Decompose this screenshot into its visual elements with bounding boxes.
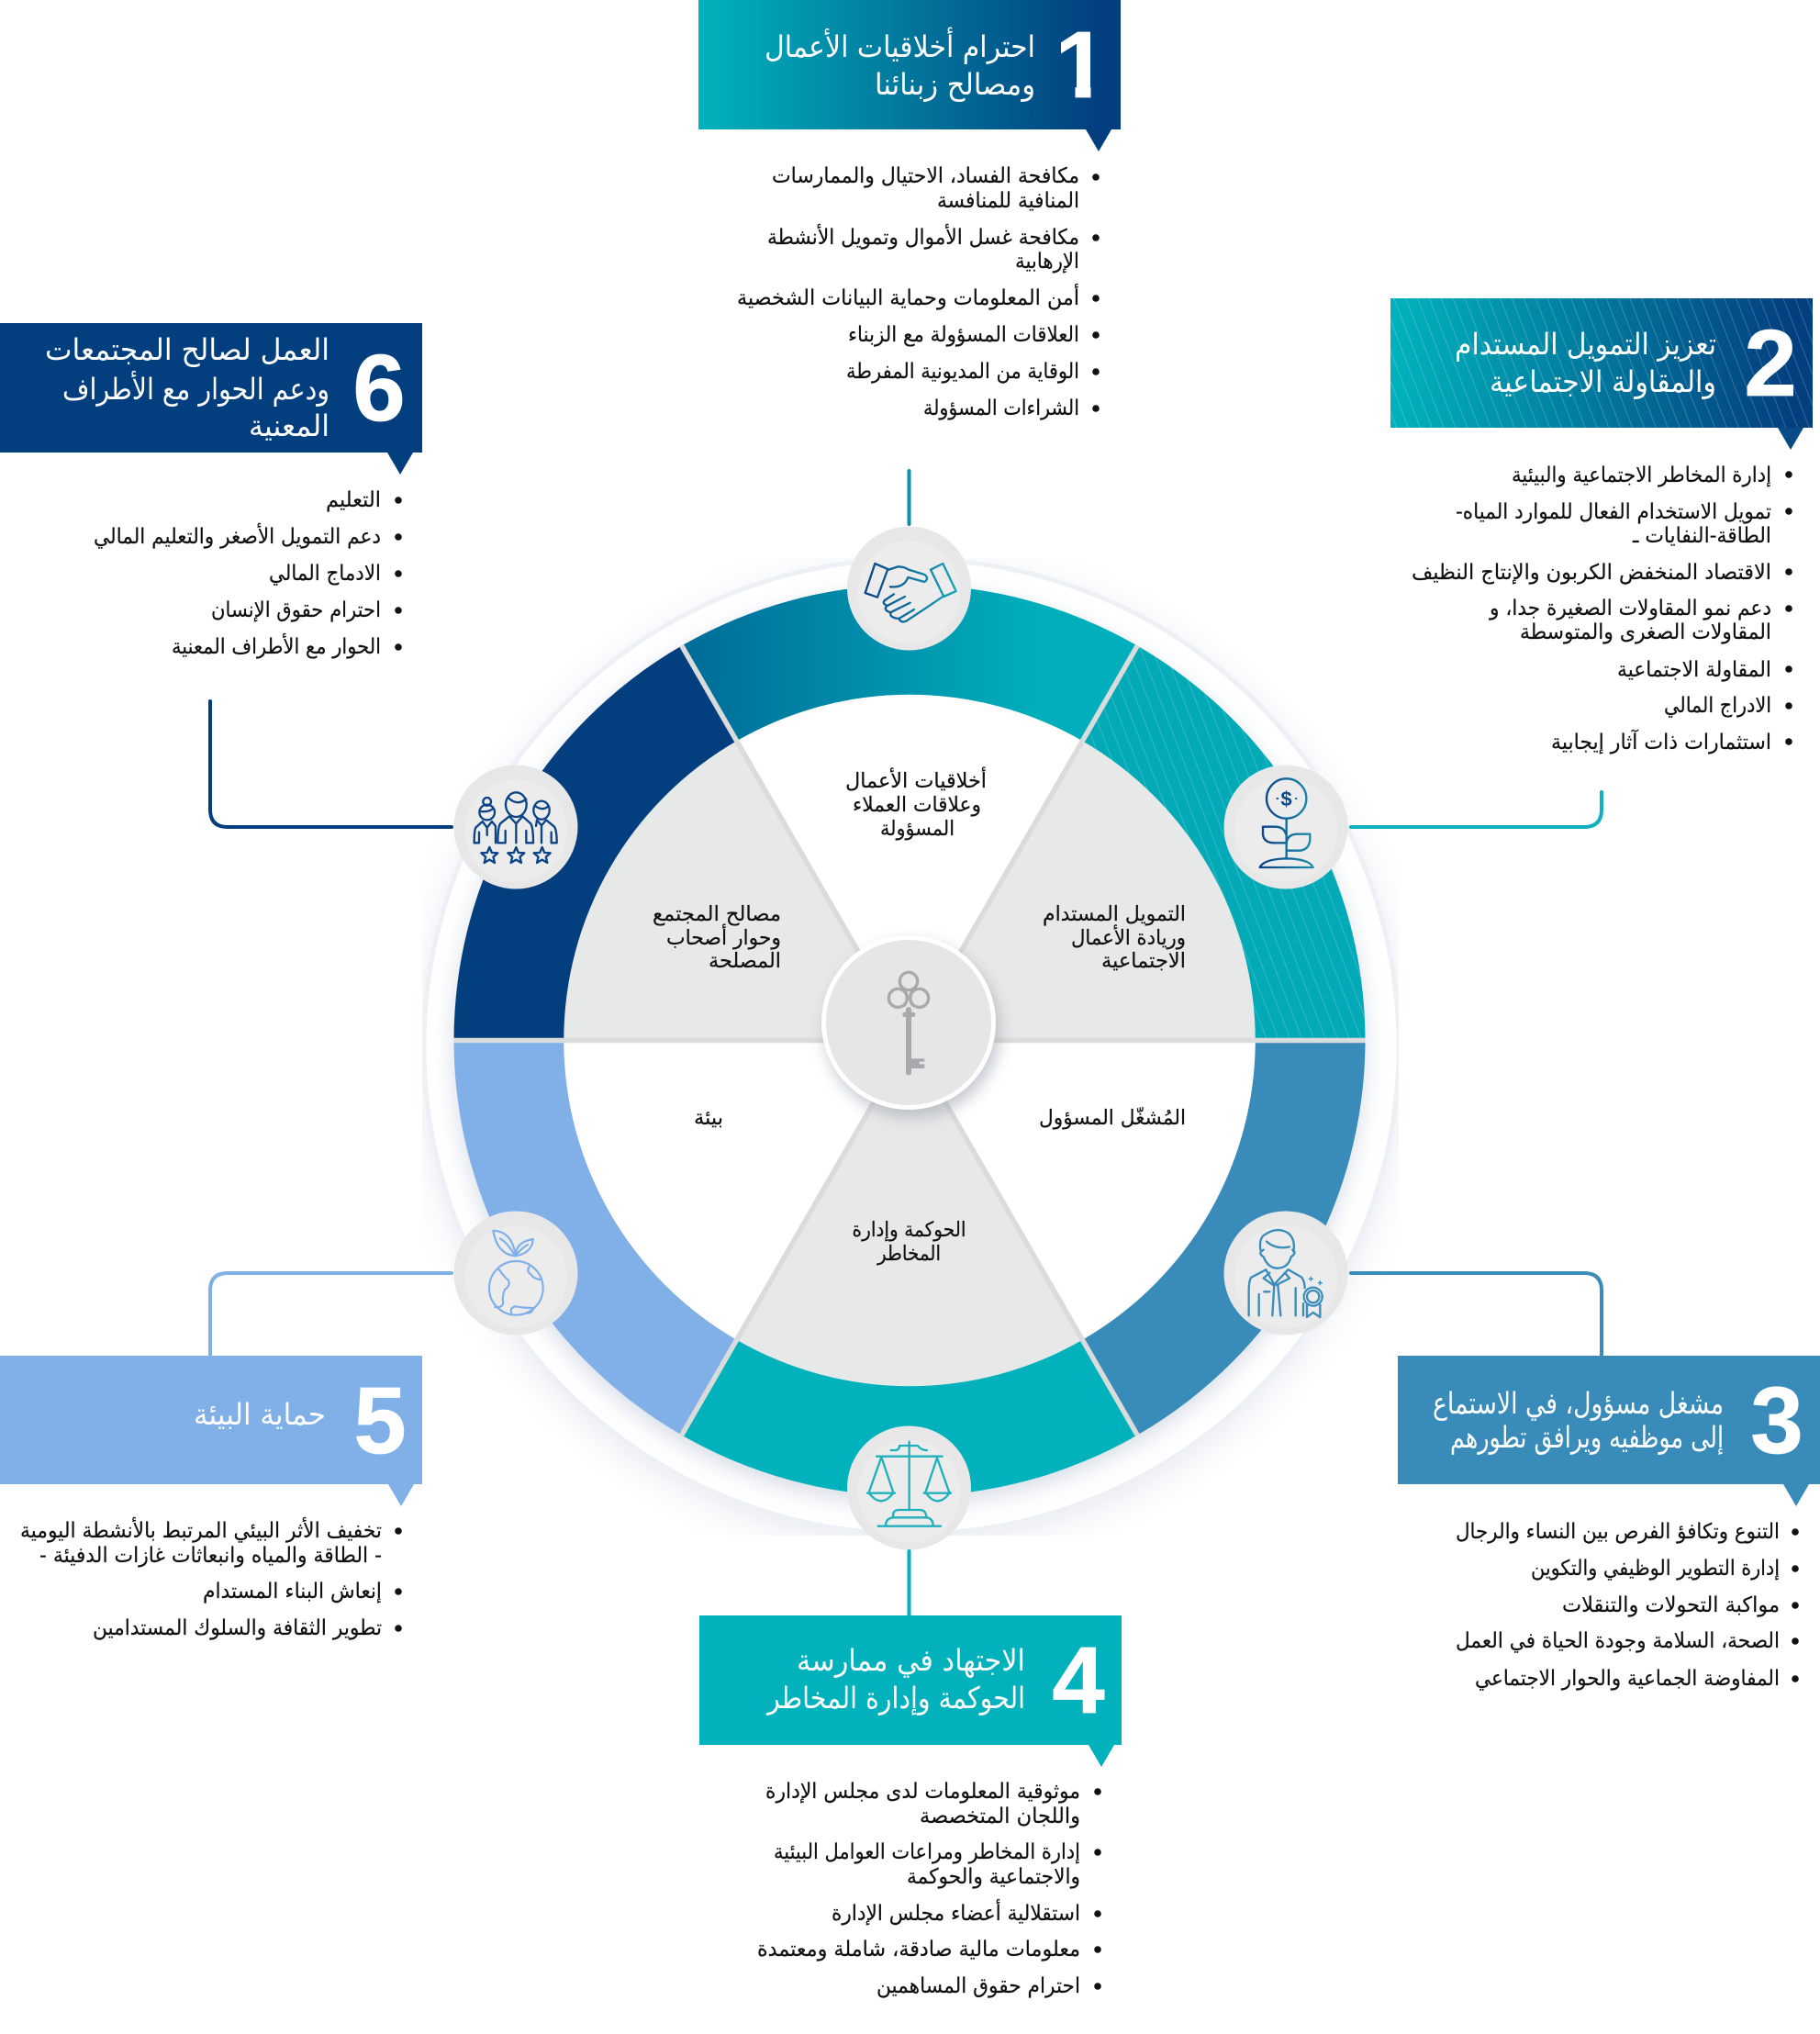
wheel label: ethics: أخلاقيات الأعمال <box>845 766 987 793</box>
heading box 1 <box>698 0 1121 151</box>
bullet list 4: والاجتماعية والحوكمة <box>907 1865 1080 1889</box>
icon: employee with badge <box>1224 1212 1347 1335</box>
heading box 4: الاجتهاد في ممارسة <box>797 1643 1025 1678</box>
bullet list 3 <box>1456 1520 1799 1691</box>
bullet list 2 <box>1412 464 1792 754</box>
bullet list 4: معلومات مالية صادقة، شاملة ومعتمدة <box>757 1938 1080 1961</box>
bullet list 2: الطاقة-النفايات ـ <box>1632 524 1771 548</box>
bullet list 6 <box>94 488 402 659</box>
heading box 1: احترام أخلاقيات الأعمال <box>765 27 1035 64</box>
bullet list 6: التعليم <box>326 488 381 512</box>
wheel halo <box>423 559 1400 1544</box>
icon: key <box>824 938 993 1107</box>
wheel label: ethics <box>845 766 987 841</box>
bullet list 6: الحوار مع الأطراف المعنية <box>172 633 381 659</box>
bullet list 2: إدارة المخاطر الاجتماعية والبيئية <box>1512 464 1771 487</box>
bullet list 3: المفاوضة الجماعية والحوار الاجتماعي <box>1475 1667 1780 1691</box>
heading box 6: 6 <box>352 335 406 441</box>
bullet list 3: إدارة التطوير الوظيفي والتكوين <box>1531 1557 1780 1581</box>
bullet list 4: احترام حقوق المساهمين <box>877 1974 1080 1998</box>
icon: three people with stars <box>453 766 578 888</box>
bullet list 5 <box>20 1517 402 1640</box>
bullet list 4: استقلالية أعضاء مجلس الإدارة <box>832 1899 1080 1926</box>
circular wheel <box>454 585 1365 1496</box>
bullet list 4 <box>757 1780 1101 1998</box>
connector: bottom <box>907 1551 910 1616</box>
wheel label: community <box>653 902 781 973</box>
wheel label: community: المصلحة <box>709 949 781 973</box>
panel 5: environment <box>0 1356 422 1640</box>
bullet list 1: الإرهابية <box>1015 250 1079 274</box>
heading box 3: 3 <box>1750 1368 1803 1473</box>
connector: top <box>907 471 910 524</box>
heading box 6: ودعم الحوار مع الأطراف <box>62 370 329 407</box>
heading box 1: ومصالح زبنائنا <box>875 67 1035 102</box>
wheel label: community: وحوار أصحاب <box>666 923 781 950</box>
bullet list 3: الصحة، السلامة وجودة الحياة في العمل <box>1456 1629 1780 1653</box>
center key circle shadow <box>824 942 1000 1118</box>
bullet list 5: تطوير الثقافة والسلوك المستدامين <box>93 1616 382 1640</box>
bullet list 1: العلاقات المسؤولة مع الزبناء <box>848 323 1079 347</box>
heading box 3 <box>1398 1356 1820 1506</box>
heading box 2: والمقاولة الاجتماعية <box>1490 364 1716 399</box>
connector: upper left <box>210 701 452 827</box>
bullet list 4: موثوقية المعلومات لدى مجلس الإدارة <box>765 1780 1080 1804</box>
bullet list 1: أمن المعلومات وحماية البيانات الشخصية <box>737 284 1079 310</box>
wheel label: community: مصالح المجتمع <box>653 902 781 926</box>
heading box 5 <box>0 1356 422 1506</box>
bullet list 4: إدارة المخاطر ومراعات العوامل البيئية <box>774 1840 1080 1864</box>
heading box 5: 5 <box>353 1368 407 1473</box>
panel 1: business ethics <box>698 0 1121 420</box>
wheel label: ethics: المسؤولة <box>880 817 955 841</box>
heading box 4: 4 <box>1052 1627 1105 1733</box>
bullet list 2: الاقتصاد المنخفض الكربون والإنتاج النظيف <box>1412 561 1771 585</box>
bullet list 2: المقاولة الاجتماعية <box>1617 658 1771 682</box>
wheel label: governance: المخاطر <box>877 1242 941 1266</box>
heading box 5: حماية البيئة <box>194 1397 326 1432</box>
bullet list 5: إنعاش البناء المستدام <box>203 1580 382 1604</box>
icon: flower with dollar: $ <box>1280 788 1292 810</box>
bullet list 1: مكافحة غسل الأموال وتمويل الأنشطة <box>767 224 1079 250</box>
bullet list 4: واللجان المتخصصة <box>920 1805 1080 1828</box>
bullet list 1: المنافية للمنافسة <box>937 189 1079 213</box>
heading box 4 <box>699 1615 1122 1767</box>
wheel label: sustainable finance: الاجتماعية <box>1101 949 1186 973</box>
sector: business ethics <box>682 585 1137 1041</box>
bullet list 2: الادراج المالي <box>1664 694 1771 718</box>
icon: flower with dollar <box>1224 766 1347 888</box>
bullet list 2: دعم نمو المقاولات الصغيرة جدا، و <box>1489 597 1771 620</box>
bullet list 5: - الطاقة والمياه وانبعاثات غازات الدفيئة - <box>39 1544 382 1568</box>
wheel label: sustainable finance <box>1043 902 1186 973</box>
wheel label: employer: المُشغّل المسؤول <box>1039 1106 1186 1130</box>
heading box 3: إلى موظفيه ويرافق تطورهم <box>1450 1420 1724 1455</box>
wheel label: ethics: وعلاقات العملاء <box>853 793 981 817</box>
sector: responsible employer <box>910 1041 1365 1435</box>
bullet list 5: تخفيف الأثر البيئي المرتبط بالأنشطة اليومية <box>20 1517 382 1543</box>
sector: sustainable finance <box>910 646 1365 1041</box>
wheel label: environment: بيئة <box>694 1106 723 1130</box>
heading box 3: مشغل مسؤول، في الاستماع <box>1433 1386 1724 1421</box>
icon circle backgrounds: handshake <box>847 527 971 650</box>
panel 4: governance <box>699 1615 1122 1998</box>
bullet list 2: المقاولات الصغرى والمتوسطة <box>1520 620 1771 644</box>
wheel label: governance: الحوكمة وإدارة <box>852 1218 966 1242</box>
heading box 2: 2 <box>1744 310 1797 416</box>
panel 6: community <box>0 323 422 659</box>
wheel label: sustainable finance: وريادة الأعمال <box>1071 924 1186 950</box>
sector: environment <box>454 1041 910 1435</box>
heading box 6: العمل لصالح المجتمعات <box>45 332 329 367</box>
connector: upper right <box>1351 792 1602 827</box>
panel 3: responsible employer <box>1398 1356 1820 1691</box>
heading box 1: 1 <box>1055 12 1108 117</box>
bullet list 1 <box>737 164 1100 420</box>
heading box 2: تعزيز التمويل المستدام <box>1455 327 1716 362</box>
icon: globe with leaves <box>453 1212 578 1335</box>
bullet list 2: تمويل الاستخدام الفعال للموارد المياه- <box>1456 500 1771 524</box>
heading box 6: المعنية <box>249 408 329 443</box>
bullet list 1: الشراءات المسؤولة <box>923 397 1079 420</box>
bullet list 1: الوقاية من المديونية المفرطة <box>846 360 1079 384</box>
bullet list 6: الادماج المالي <box>269 562 381 586</box>
icon: scales <box>847 1426 971 1549</box>
heading box 6 <box>0 323 422 475</box>
sector: community <box>454 646 910 1041</box>
heading box 4: الحوكمة وإدارة المخاطر <box>765 1681 1025 1715</box>
connector: lower left <box>210 1273 452 1356</box>
wheel label: sustainable finance: التمويل المستدام <box>1043 902 1186 926</box>
bullet list 3: التنوع وتكافؤ الفرص بين النساء والرجال <box>1456 1520 1780 1544</box>
connector: lower right <box>1351 1273 1602 1356</box>
bullet list 3: مواكبة التحولات والتنقلات <box>1562 1593 1780 1617</box>
bullet list 6: احترام حقوق الإنسان <box>211 598 381 622</box>
heading box 2 <box>1390 298 1813 450</box>
bullet list 6: دعم التمويل الأصغر والتعليم المالي <box>94 523 381 549</box>
panel 2: sustainable finance <box>1390 298 1813 754</box>
bullet list 1: مكافحة الفساد، الاحتيال والممارسات <box>772 164 1079 188</box>
bullet list 2: استثمارات ذات آثار إيجابية <box>1551 729 1771 754</box>
wheel label: governance <box>852 1218 966 1266</box>
sector: governance <box>682 1041 1137 1496</box>
